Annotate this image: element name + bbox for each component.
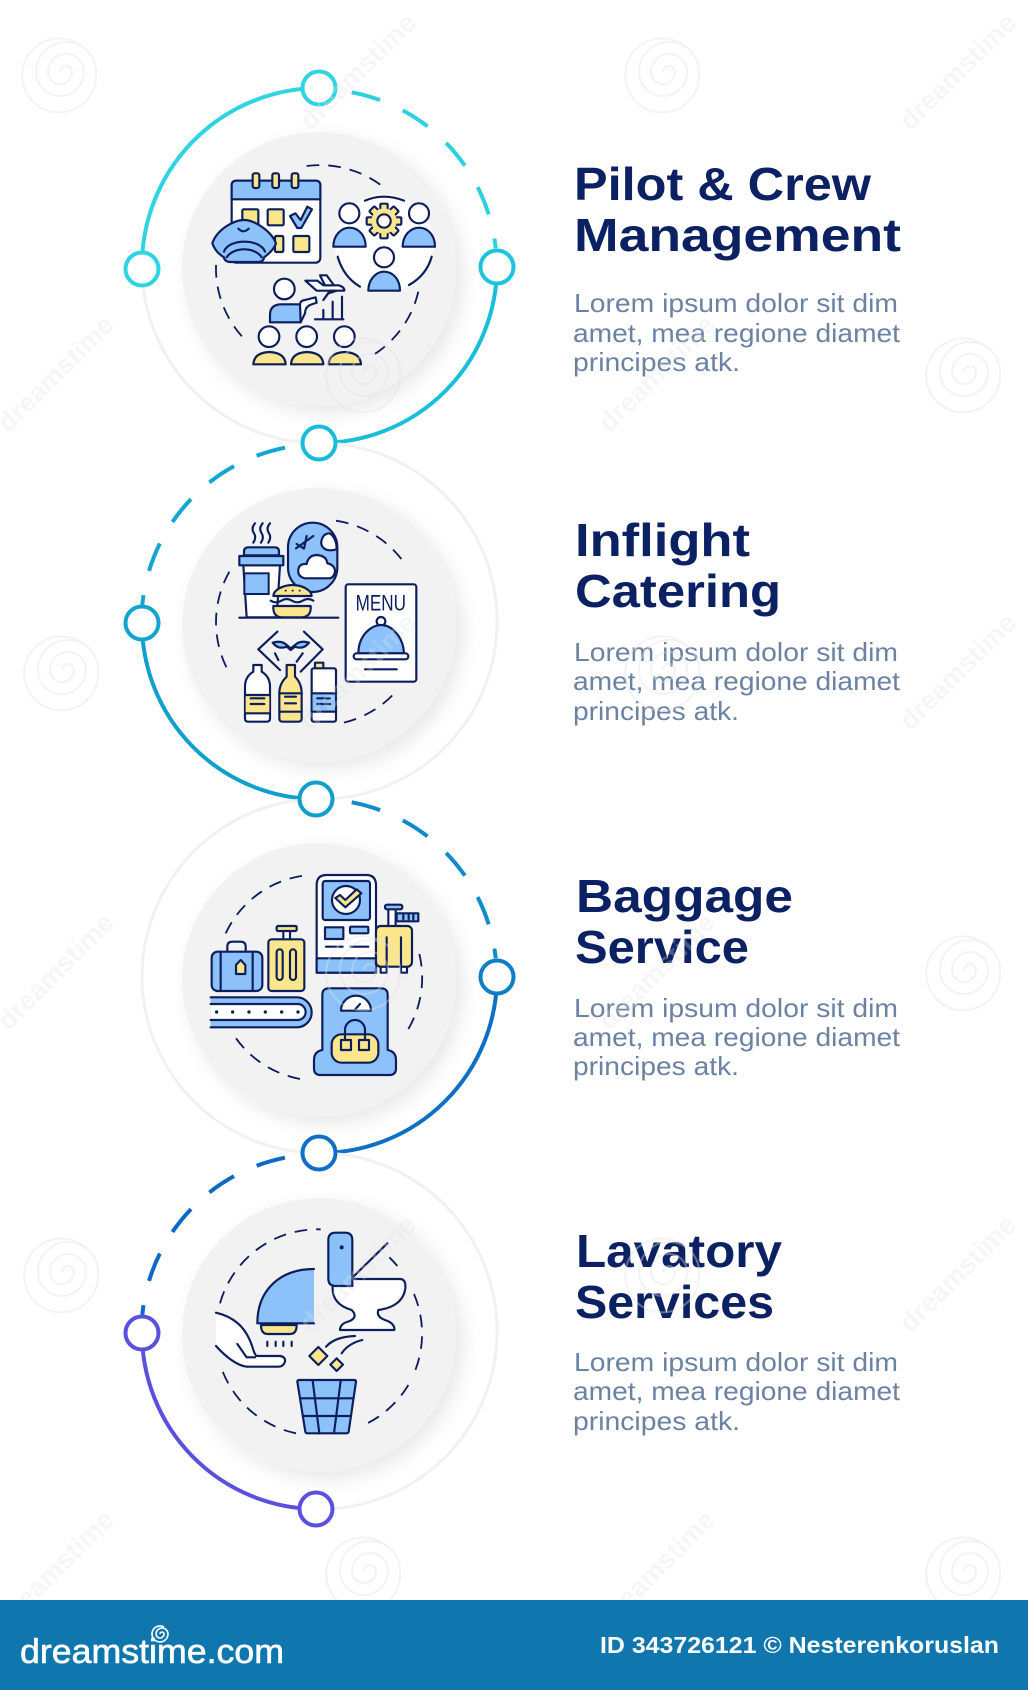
node: left	[126, 606, 158, 640]
text: pilot and crew management: Management	[574, 209, 901, 261]
watermark overlay: dreamstime	[293, 607, 422, 736]
text: inflight catering: amet, mea regione diamet	[573, 666, 901, 696]
node: left	[126, 252, 158, 286]
icon: logo spiral	[152, 1626, 168, 1642]
solid arc left to bottom	[142, 623, 316, 799]
text: baggage service: Service	[575, 921, 749, 973]
text: lavatory services: Lavatory	[576, 1225, 782, 1277]
node: bottom of first loop	[302, 426, 336, 460]
watermark overlay: dreamstime	[592, 309, 721, 438]
text: pilot and crew management: Lorem ipsum dolor sit dim	[574, 288, 898, 318]
gray disc	[182, 488, 456, 762]
solid arc left to bottom	[142, 1333, 316, 1509]
footer id and credit: ID 343726121 © Nesterenkoruslan	[600, 1632, 999, 1658]
node: bottom of third loop	[302, 1136, 336, 1170]
panel: baggage service circle	[142, 782, 514, 1153]
watermark overlay: dreamstime	[592, 907, 721, 1036]
watermark overlay: dreamstime	[293, 7, 422, 136]
watermark overlay: dreamstime	[893, 1209, 1022, 1338]
watermark overlay: dreamstime	[592, 1504, 721, 1633]
icon: schedule, crew and training	[212, 165, 435, 364]
icon: coffee, burger, window, menu and drinks	[216, 521, 416, 723]
dashed arc top to left	[142, 1158, 285, 1315]
footer bar	[0, 1600, 1028, 1690]
text: lavatory services: Services	[575, 1276, 774, 1328]
text: inflight catering: Lorem ipsum dolor sit dim	[574, 637, 898, 667]
panel: lavatory services circle	[126, 1136, 497, 1526]
gray disc	[182, 1198, 456, 1472]
solid arc top to left	[142, 88, 319, 269]
text: inflight catering: Catering	[575, 565, 781, 617]
text: lavatory services: principes atk.	[573, 1406, 740, 1436]
text: baggage service: Baggage	[576, 870, 793, 922]
text: baggage service: principes atk.	[573, 1051, 739, 1081]
text: inflight catering: Inflight	[575, 514, 750, 566]
solid arc right to bottom	[319, 267, 497, 443]
text: inflight catering	[573, 514, 901, 726]
text: pilot and crew management: principes atk.	[573, 347, 740, 377]
panel: inflight catering circle	[126, 426, 497, 799]
dashed arc top to right	[352, 802, 496, 958]
text: baggage service: amet, mea regione diamet	[573, 1022, 901, 1052]
icon: luggage, conveyor, kiosk and scale	[211, 875, 422, 1080]
text: lavatory services: Lorem ipsum dolor sit dim	[574, 1347, 898, 1377]
menu label: MENU	[356, 591, 406, 616]
watermark overlay: dreamstime	[293, 1209, 422, 1338]
text: lavatory services	[573, 1225, 901, 1436]
text: pilot and crew management: Pilot & Crew	[574, 158, 871, 210]
dashed arc top to right	[352, 92, 496, 248]
watermark overlay: dreamstime	[893, 607, 1022, 736]
panel: pilot and crew management circle	[126, 72, 514, 443]
node: bottom of second loop	[300, 782, 332, 816]
gray disc	[182, 132, 456, 406]
node: top	[302, 72, 336, 104]
footer logo: dreamstime.com	[20, 1633, 284, 1671]
text: baggage service	[573, 870, 901, 1081]
gray disc	[182, 843, 456, 1117]
text: inflight catering: principes atk.	[573, 696, 739, 726]
watermark overlay: dreamstime	[893, 7, 1022, 136]
solid arc right to bottom	[319, 977, 497, 1153]
text: pilot and crew management	[573, 158, 901, 377]
node: bottom	[300, 1492, 332, 1526]
node: left	[126, 1316, 158, 1350]
dashed arc top to left	[142, 448, 285, 605]
text: pilot and crew management: amet, mea regione diamet	[573, 318, 901, 348]
node: right	[480, 960, 514, 994]
icon: toilet, hand dryer and waste bin	[216, 1229, 422, 1433]
text: lavatory services: amet, mea regione diamet	[573, 1376, 901, 1406]
text: baggage service: Lorem ipsum dolor sit dim	[574, 993, 898, 1023]
node: right	[480, 250, 514, 284]
